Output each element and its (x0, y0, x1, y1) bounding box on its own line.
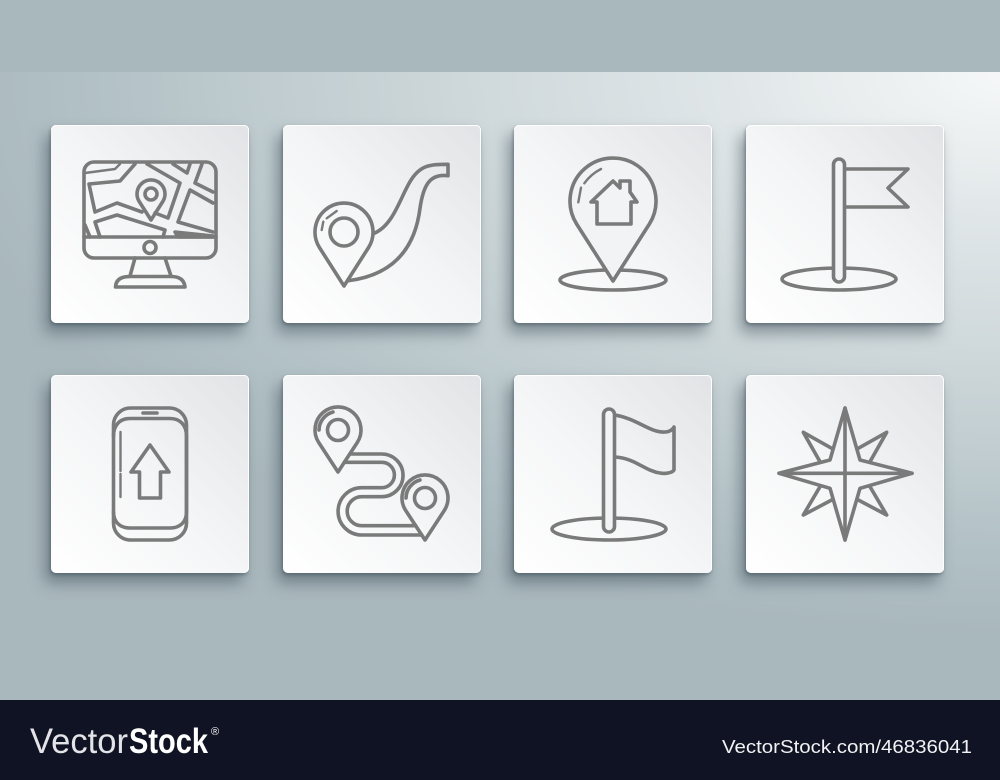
icon: pin with house on ground (560, 158, 666, 290)
logo: VectorStock: ® (211, 726, 219, 738)
panel: home location pin (514, 125, 712, 323)
footer bar (0, 700, 1000, 780)
logo: VectorStock: Stock (129, 722, 208, 761)
logo: VectorStock (30, 722, 219, 761)
icon: waving flag on ground (552, 409, 674, 540)
panel: wind rose (746, 375, 944, 573)
panel: route between two pins (283, 375, 481, 573)
panel: smartphone with arrow (51, 375, 249, 573)
panel: waving flag (514, 375, 712, 573)
panel: pin with ribbon road (283, 125, 481, 323)
icon: smartphone with up arrow (114, 408, 186, 540)
panel: notched flag (746, 125, 944, 323)
icon: location pin with curved road (315, 164, 448, 286)
icon: compass wind rose (779, 408, 912, 540)
icon: winding route with pins (315, 407, 448, 540)
logo: VectorStock: Vector (30, 722, 128, 761)
panel: monitor with map (51, 125, 249, 323)
icon: monitor with map and pin (84, 162, 216, 287)
image id url: VectorStock.com/46836041 (722, 736, 972, 757)
icon: swallowtail flag on ground (782, 159, 908, 290)
